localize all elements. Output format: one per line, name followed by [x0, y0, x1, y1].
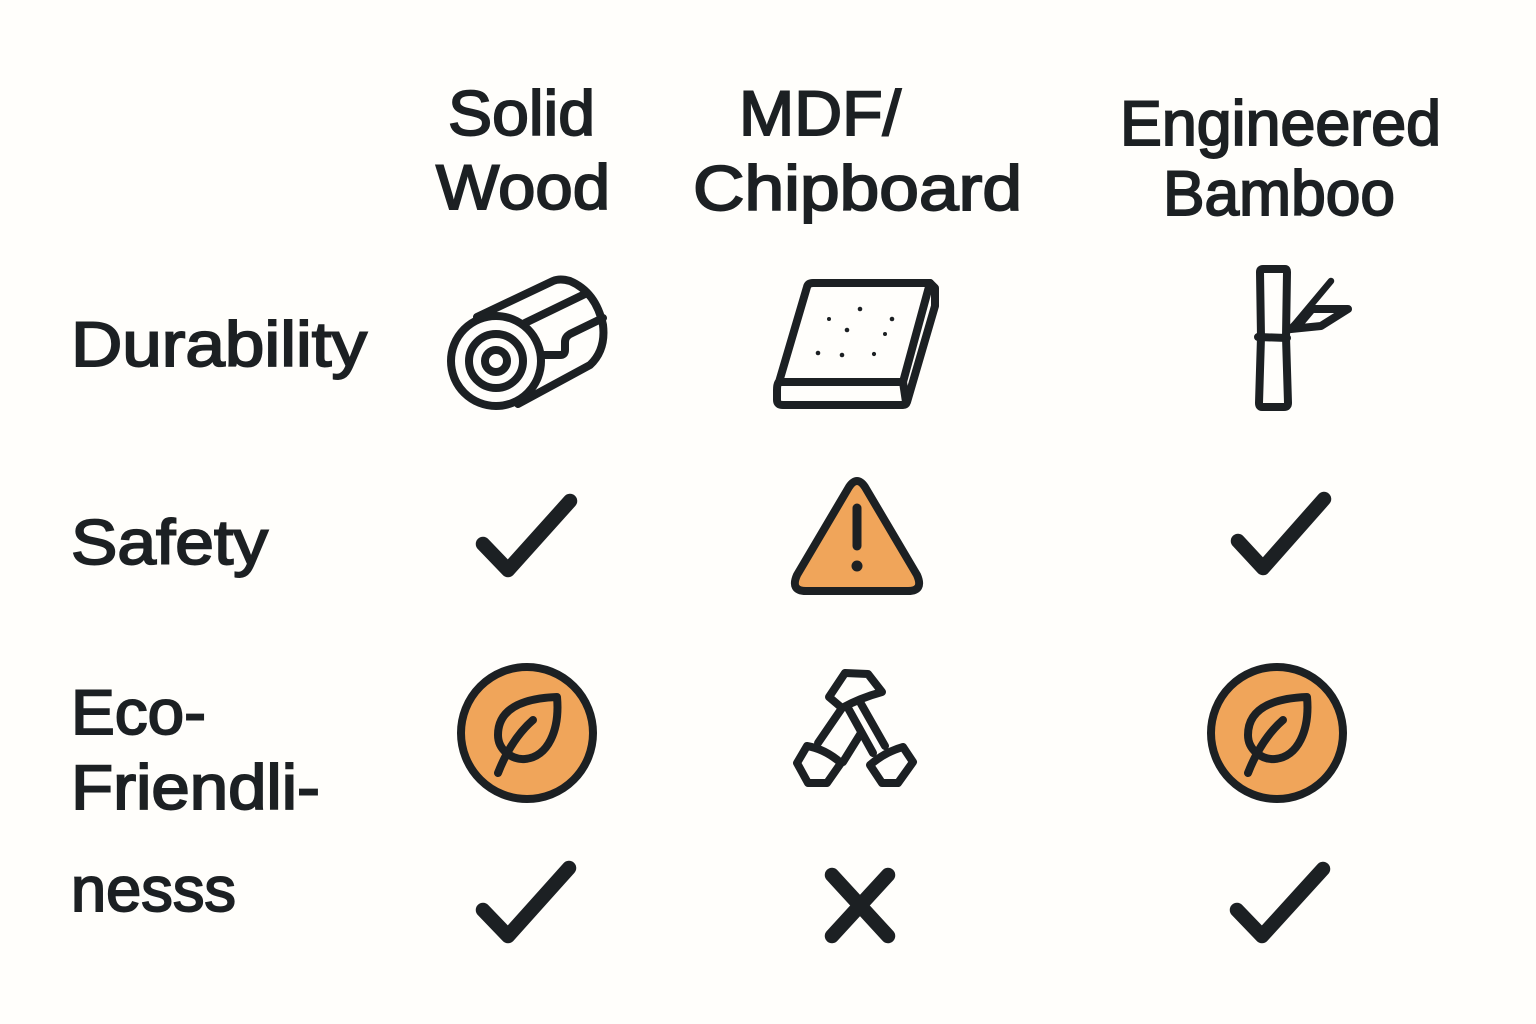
row label: Eco-Friendliness: Eco-: [71, 678, 206, 748]
column heading: MDF/Chipboard: [693, 79, 1022, 224]
column heading: MDF/Chipboard: MDF/: [739, 79, 902, 149]
row label: Durability: Durability: [71, 310, 368, 380]
icon: wood log: [451, 280, 603, 406]
icon: check, solid wood bottom row: [483, 868, 569, 936]
column heading: Engineered Bamboo: Bamboo: [1163, 159, 1395, 229]
column heading: MDF/Chipboard: Chipboard: [693, 154, 1022, 224]
board speckles: [816, 307, 894, 357]
column heading: Solid Wood: Wood: [436, 153, 610, 223]
icon: leaf badge, bamboo: [1211, 667, 1343, 799]
icon: bamboo stalk: [1258, 269, 1348, 407]
icon: cross, MDF bottom row: [832, 875, 888, 936]
icon: warning triangle: [795, 481, 919, 591]
column heading: Engineered Bamboo: [1120, 89, 1441, 229]
icon: check, bamboo bottom row: [1237, 869, 1323, 936]
row label: Eco-Friendliness: nesss: [71, 855, 236, 925]
row label: Eco-Friendliness: [71, 678, 320, 925]
icon: tools, mallets and bolts: [797, 673, 913, 783]
icon: leaf badge, solid wood: [461, 667, 593, 799]
column heading: Solid Wood: Solid: [448, 79, 595, 149]
column heading: Solid Wood: [436, 79, 610, 223]
icon: check, solid wood safety: [483, 501, 570, 570]
icon: check, bamboo safety: [1238, 499, 1324, 568]
column heading: Engineered Bamboo: Engineered: [1120, 89, 1441, 159]
icon: particle board: [777, 283, 935, 405]
row label: Eco-Friendliness: Friendli-: [71, 753, 320, 823]
row label: Safety: Safety: [71, 508, 269, 578]
